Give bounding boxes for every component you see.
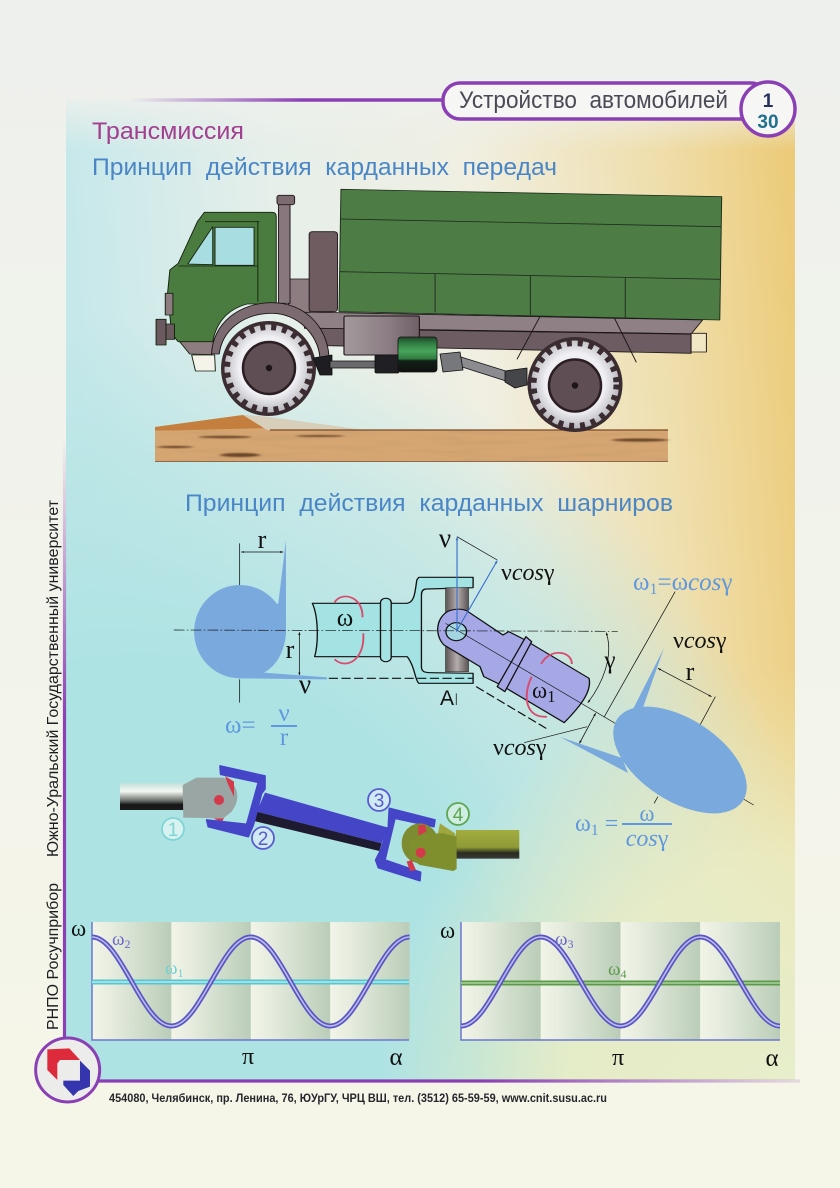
chart: angular velocity ω3 and ω4 [440, 918, 780, 1072]
formula: ω1 = ω cos γ: ω [633, 569, 649, 596]
diagram labels: A [440, 687, 454, 710]
formula: ω1 = ω / cos γ: = [599, 811, 618, 837]
teal driving yoke [312, 577, 473, 683]
exhaust and air intake [277, 195, 337, 312]
logo [36, 1038, 100, 1102]
formula: ω = ν / r [225, 700, 297, 751]
velocity vectors [456, 537, 497, 632]
dimension arrows [241, 552, 712, 743]
chart: angular velocity ω1 and ω2: ω [112, 929, 125, 950]
diagram labels: νcosγ [493, 735, 547, 761]
chart: angular velocity ω3 and ω4: α [765, 1045, 779, 1072]
number 3 [368, 789, 390, 812]
header tab: Устройство автомобилей: 30 [757, 112, 779, 133]
rotation arrows [335, 596, 572, 717]
intermediate shaft with yokes [207, 766, 435, 881]
number 4: 4 [453, 805, 464, 826]
background panel [64, 98, 800, 1081]
vertical text: РНПО Росучприбор: РНПО Росучприбор [45, 883, 62, 1030]
formula: ω = ν / r: ω= [225, 712, 256, 739]
footer address: 454080, Челябинск, пр. Ленина, 76, ЮУрГУ, ЧРЦ ВШ, тел. (3512) 65-59-59, www.cnit.susu.ac.ru [109, 1093, 607, 1105]
input shaft [120, 783, 184, 810]
joint and velocity drawing [174, 537, 754, 805]
vertical text: Южно-Уральский Государственный университет: Южно-Уральский Государственный университет [45, 499, 62, 857]
cross pin [446, 588, 469, 672]
diagram labels: ν [439, 523, 451, 553]
road surface [155, 415, 668, 462]
illustration: 3D cardan shaft with joints [120, 766, 519, 881]
header tab: Устройство автомобилей: Устройство автомобилей [459, 87, 728, 114]
formula: ω1 = ω / cos γ: 1 [591, 822, 599, 839]
formula: ω1 = ω cos γ: =ω [657, 569, 688, 596]
chart: angular velocity ω1 and ω2: 2 [125, 937, 131, 951]
heading: Трансмиссия: Трансмиссия [92, 118, 244, 145]
cab [156, 212, 276, 371]
chart: angular velocity ω3 and ω4: ω [440, 918, 455, 943]
chart: angular velocity ω1 and ω2: π [242, 1044, 254, 1070]
diagram labels: r [258, 525, 267, 554]
chart: angular velocity ω3 and ω4: ω [555, 929, 568, 950]
rear wheel [528, 337, 622, 432]
output joint block [402, 823, 457, 871]
diagram labels: γ [603, 647, 616, 674]
truck body [156, 189, 722, 371]
chart: angular velocity ω3 and ω4: 4 [621, 967, 627, 981]
diagram labels: 1 [547, 687, 556, 706]
input joint block [183, 776, 237, 822]
chart: angular velocity ω1 and ω2: ω [165, 958, 178, 979]
diagram labels: r [686, 657, 695, 686]
diagram labels [258, 523, 727, 761]
output shaft [456, 830, 519, 859]
driven shaft [438, 609, 590, 723]
chart: angular velocity ω3 and ω4: 3 [568, 937, 574, 951]
chart: angular velocity ω1 and ω2: α [389, 1044, 403, 1071]
heading: Принцип действия карданных шарниров: Принцип действия карданных шарниров [185, 490, 673, 517]
centre lines [174, 537, 754, 805]
number 1: 1 [168, 820, 178, 841]
number 3: 3 [374, 791, 384, 812]
diagram labels: ν [299, 669, 311, 699]
header tab: Устройство автомобилей: 1 [763, 91, 774, 112]
front wheel [221, 321, 316, 416]
cargo body with tarpaulin [339, 189, 722, 320]
formula: ω1 = ω / cos γ [575, 801, 672, 852]
left velocity disc [194, 540, 327, 679]
diagram: principle of the cardan joint [174, 523, 765, 852]
formula: ω1 = ω / cos γ: ω [575, 811, 591, 837]
diagram labels: νcosγ [501, 560, 555, 586]
number 1 [162, 818, 184, 841]
formula: ω1 = ω cos γ: 1 [649, 581, 657, 598]
number 4 [447, 803, 469, 826]
diagram labels: ω [337, 605, 353, 632]
chart: angular velocity ω3 and ω4: π [612, 1045, 624, 1071]
chart: angular velocity ω3 and ω4: ω [608, 959, 621, 980]
right velocity disc [560, 648, 765, 835]
formula: ω = ν / r: r [280, 724, 289, 751]
chart: angular velocity ω1 and ω2: ω [71, 916, 86, 941]
chassis frame [305, 312, 706, 362]
formula: ω1 = ω cos γ: cosγ [688, 569, 732, 596]
front fender and battery box [212, 303, 419, 357]
header tab: Устройство автомобилей [443, 82, 795, 136]
heading: Принцип действия карданных передач: Принцип действия карданных передач [92, 154, 557, 181]
transfer case and cardan shafts [313, 337, 527, 388]
chart: angular velocity ω1 and ω2: 1 [178, 966, 184, 980]
formula: ω1 = ω / cos γ: ω [639, 801, 655, 826]
number 2: 2 [258, 829, 268, 850]
diagram labels: r [286, 635, 295, 664]
diagram labels: νcosγ [673, 628, 727, 654]
formula: ω1 = ω / cos γ: cosγ [626, 826, 669, 852]
illustration: truck with cardan drive on uneven road [155, 189, 722, 462]
chart: angular velocity ω1 and ω2 [71, 916, 410, 1071]
number 2 [252, 827, 274, 850]
formula: ω = ν / r: ν [278, 700, 290, 727]
diagram labels: ω [532, 678, 547, 703]
